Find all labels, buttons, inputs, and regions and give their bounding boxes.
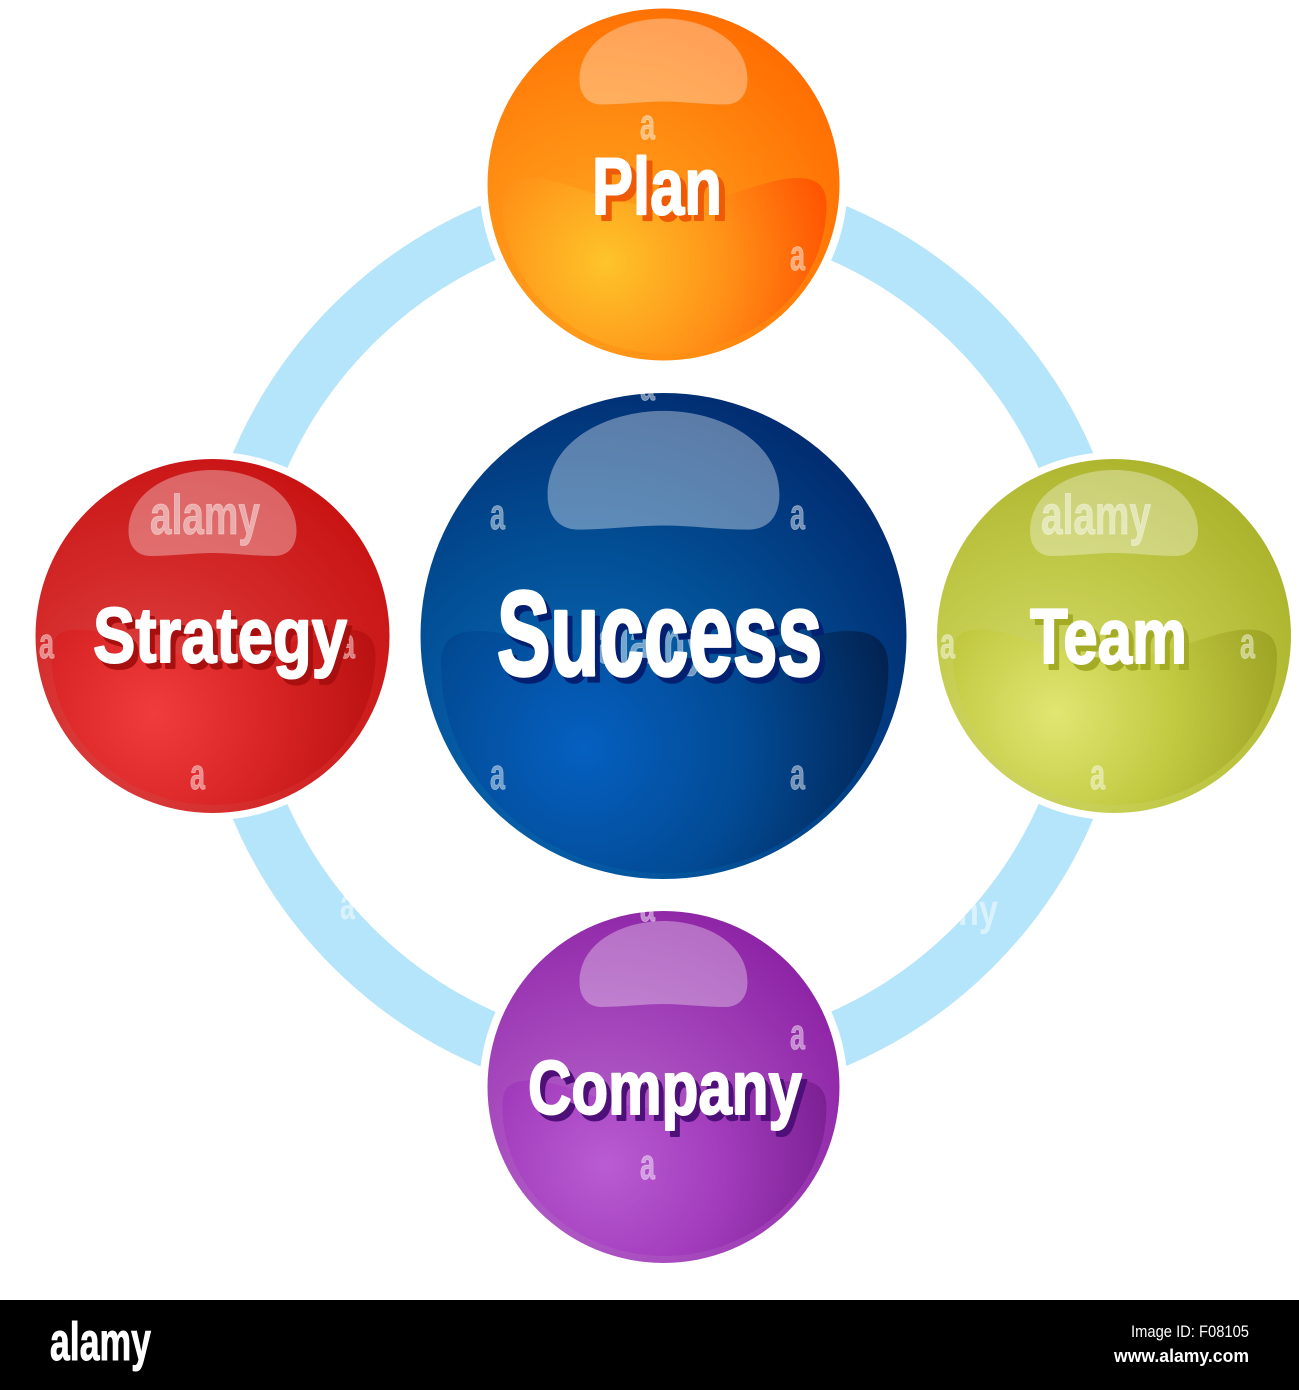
node: Plan: a xyxy=(790,231,805,280)
node: Company: Company xyxy=(528,1046,802,1131)
node: Team: a xyxy=(1240,619,1255,668)
node: Company xyxy=(488,882,840,1263)
node: Plan: Plan xyxy=(598,148,728,238)
node: Team: Team xyxy=(1035,598,1192,686)
node: Strategy: a xyxy=(39,619,54,668)
node: Success: a xyxy=(490,490,505,539)
image id: Image ID: F08105 xyxy=(1131,1322,1249,1341)
node: Plan: a xyxy=(640,100,655,149)
node: Company: a xyxy=(640,882,655,931)
node: Success: Success xyxy=(502,573,827,707)
node: Strategy: a xyxy=(340,619,355,668)
node: Company: Company xyxy=(533,1052,807,1137)
node: Success: a xyxy=(490,750,505,799)
node: Team: Team xyxy=(1030,592,1187,680)
watermark on ring: a xyxy=(340,880,355,929)
node: Success xyxy=(420,361,906,879)
node: Success: alamy xyxy=(597,608,707,677)
node: Strategy: a xyxy=(190,750,205,799)
node: Team: a xyxy=(1090,750,1105,799)
node: Strategy: Strategy xyxy=(93,591,347,679)
footer logo: alamy xyxy=(50,1312,151,1372)
node: Plan: Plan xyxy=(592,142,722,232)
node: Strategy xyxy=(36,459,390,813)
node: Company: a xyxy=(790,1010,805,1059)
node: Strategy: alamy xyxy=(150,483,260,546)
node: Plan xyxy=(488,8,840,360)
node: Team xyxy=(937,459,1291,813)
node: Team: alamy xyxy=(1041,483,1151,546)
node: Success: a xyxy=(640,361,655,410)
node: Strategy: Strategy xyxy=(98,597,352,685)
node: Success: a xyxy=(790,490,805,539)
node: Success: Success xyxy=(497,567,822,701)
watermark on ring: ny xyxy=(958,886,998,935)
node: Success: a xyxy=(790,750,805,799)
node: Team: a xyxy=(940,619,955,668)
website: www.alamy.com xyxy=(1113,1346,1249,1366)
node: Company: a xyxy=(640,1140,655,1189)
footer bar xyxy=(0,1300,1299,1390)
watermark on ring xyxy=(340,880,998,935)
